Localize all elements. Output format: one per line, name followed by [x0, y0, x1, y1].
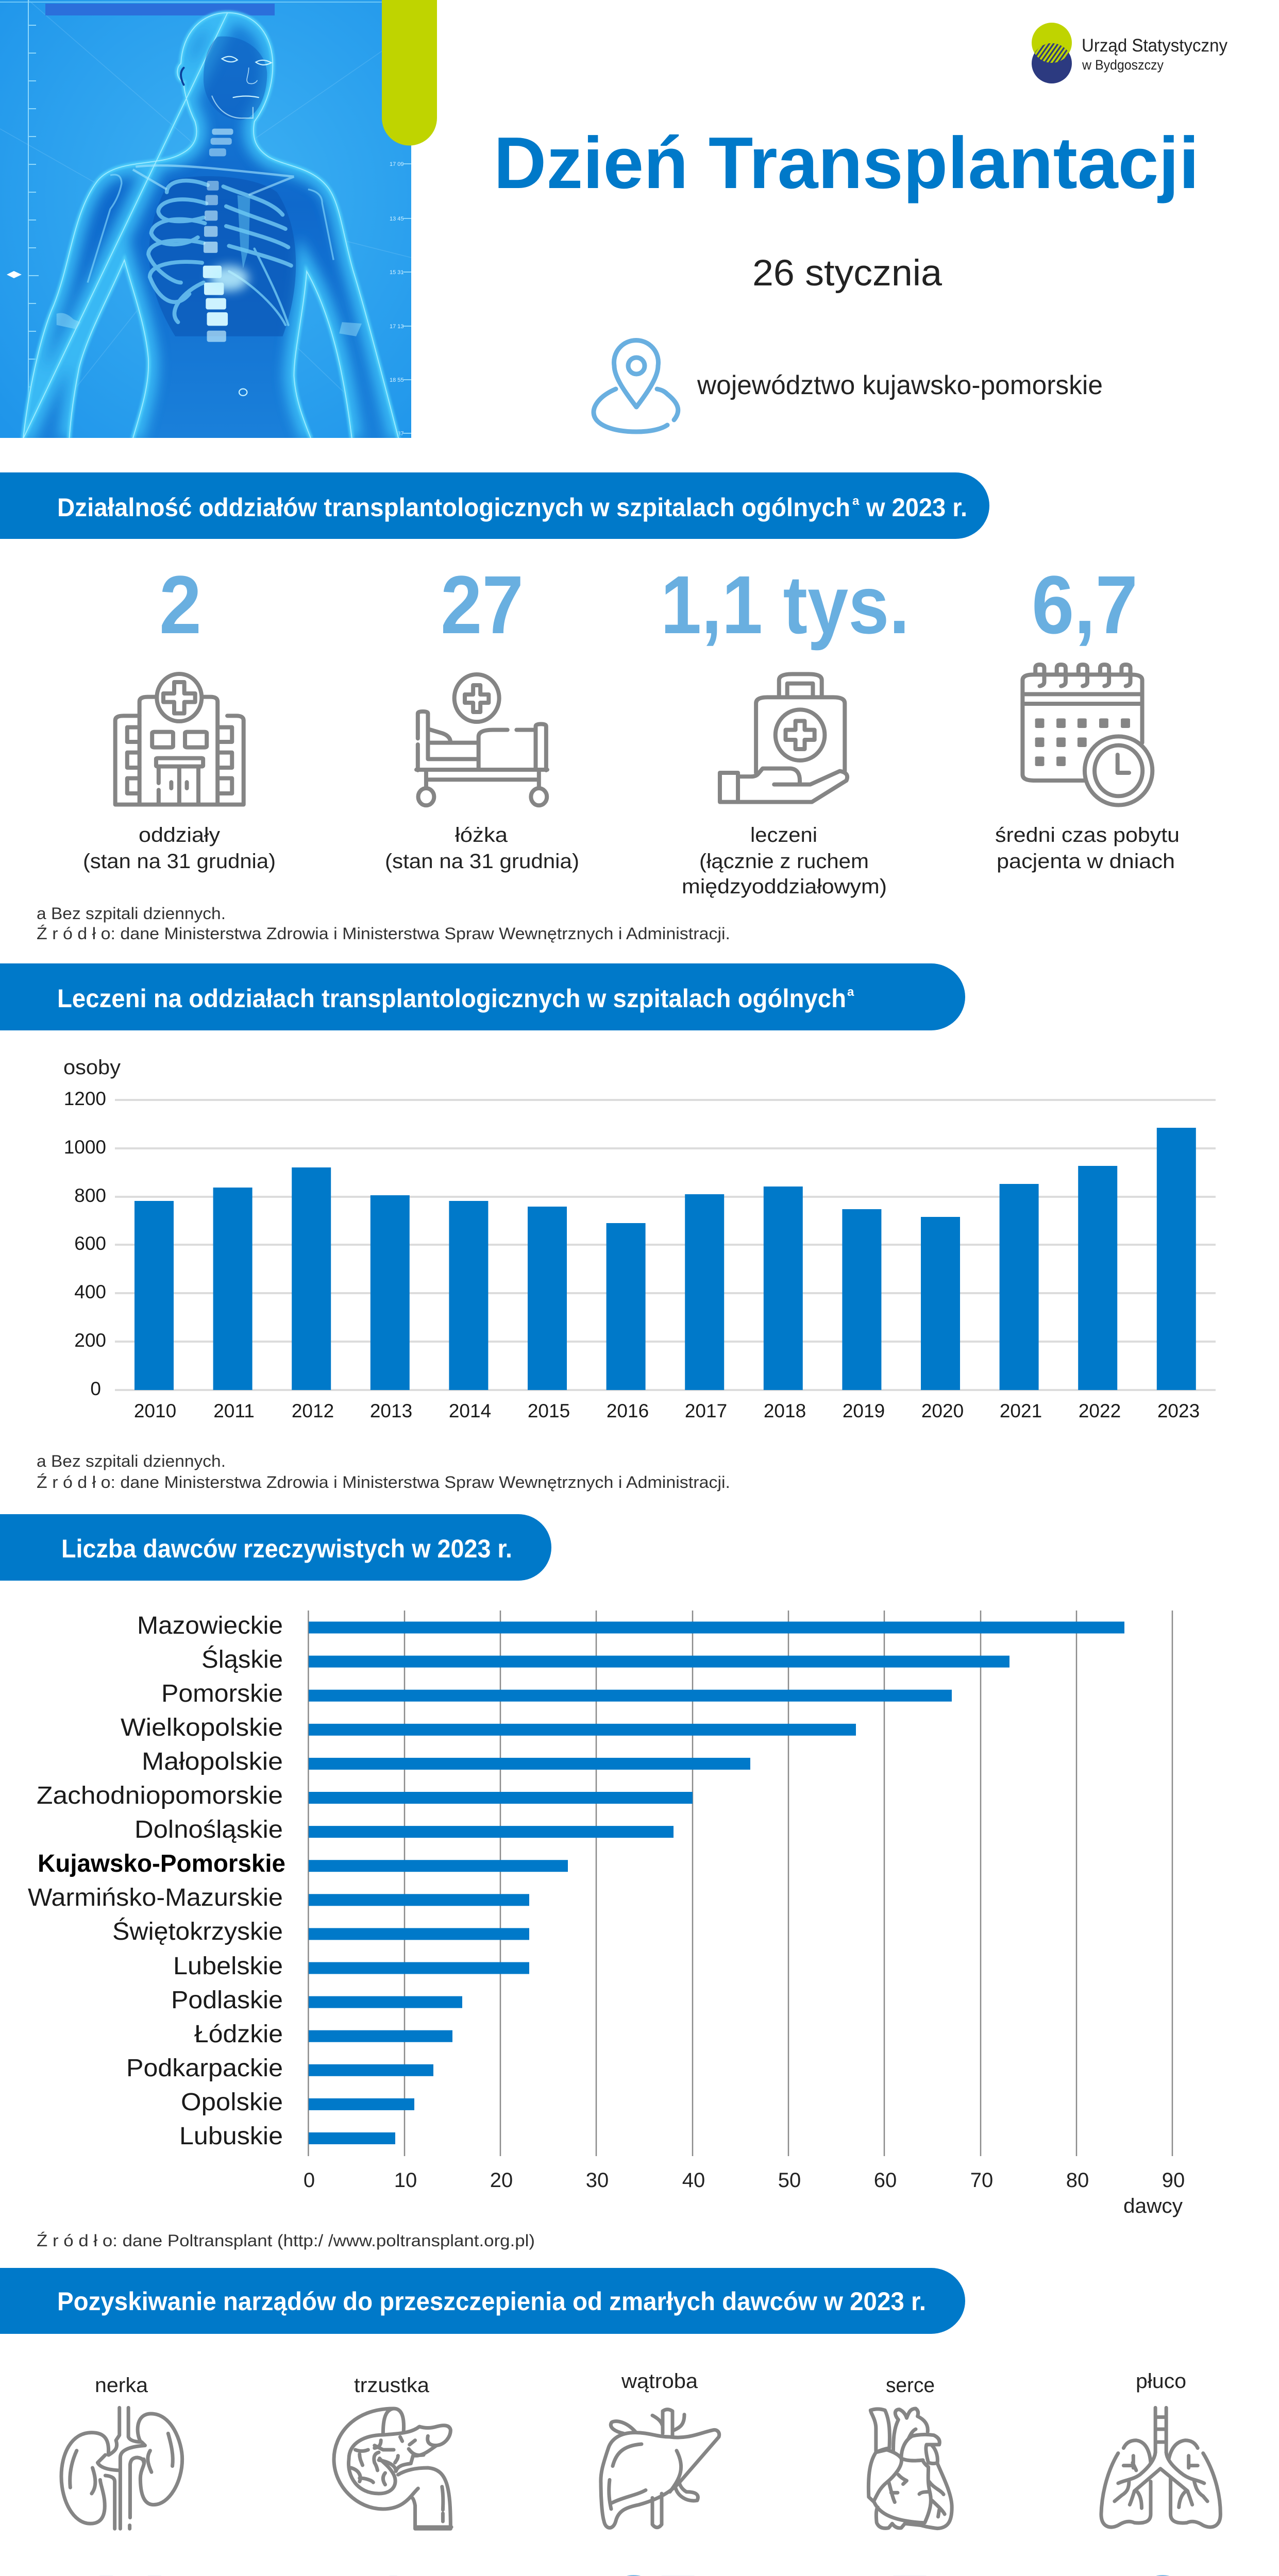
- bar chart: patients by year: 2013: [370, 1400, 412, 1421]
- bar chart: patients by year: 2022: [1079, 1400, 1121, 1421]
- stat: average stay: 6,7: [1032, 558, 1138, 651]
- bar chart: donors by voivodeship: Pomorskie: [161, 1680, 283, 1707]
- bar chart: patients by year: 2020: [921, 1400, 964, 1421]
- footnote and source: a Bez szpitali dziennych.: [37, 904, 226, 923]
- bar chart: patients by year: 2010: [134, 1400, 176, 1421]
- panel: header: [0, 0, 1227, 438]
- label: [385, 824, 579, 873]
- accent: green pill: [382, 0, 437, 145]
- organ: pancreas: [334, 2374, 451, 2576]
- bar chart: donors by voivodeship: Łódzkie: [194, 2021, 283, 2048]
- bar chart: donors by voivodeship: dawcy: [1123, 2195, 1183, 2217]
- label: [682, 824, 887, 898]
- bar chart: patients by year: 2018: [764, 1400, 806, 1421]
- heading band: [0, 2268, 965, 2334]
- bar chart: patients by year: 2011: [213, 1400, 255, 1421]
- bar chart: patients by year: 2014: [449, 1400, 491, 1421]
- illustration: human torso x-ray: 15 31: [390, 269, 404, 276]
- logo: Urząd Statystyczny w Bydgoszczy: Urząd Statystyczny: [1082, 36, 1227, 56]
- bar chart: patients by year: 2021: [1000, 1400, 1042, 1421]
- bar chart: patients by year: 2016: [607, 1400, 649, 1421]
- heading band: Liczba dawców rzeczywistych w 2023 r.: [61, 1534, 512, 1563]
- heading band: Pozyskiwanie narządów do przeszczepienia od zmarłych dawców w 2023 r.: [57, 2287, 926, 2316]
- icon: kidneys: [61, 2408, 182, 2529]
- stat: average stay: [995, 558, 1180, 873]
- bar chart: donors by voivodeship: 50: [778, 2169, 801, 2192]
- heading band: [0, 1514, 551, 1581]
- bar chart: donors by voivodeship: 40: [682, 2169, 705, 2192]
- bar chart: patients by year: 400: [74, 1281, 106, 1302]
- bar chart: patients by year: [63, 1056, 1216, 1421]
- footnote and source: [37, 1452, 730, 1492]
- bar chart: donors by voivodeship: Podlaskie: [171, 1987, 283, 2014]
- bar chart: donors by voivodeship: Wielkopolskie: [121, 1714, 283, 1741]
- bar chart: donors by voivodeship: 60: [874, 2169, 897, 2192]
- illustration: human torso x-ray: 13 45: [390, 216, 404, 222]
- label: (stan na 31 grudnia): [83, 850, 276, 873]
- bar chart: donors by voivodeship: 70: [970, 2169, 993, 2192]
- icon: location pin: [594, 340, 678, 432]
- label: [995, 824, 1180, 873]
- illustration: human torso x-ray: [0, 0, 411, 438]
- bar chart: donors by voivodeship: 30: [586, 2169, 609, 2192]
- organ: kidney: [61, 2374, 182, 2576]
- organ: liver: [601, 2370, 719, 2576]
- logo: Urząd Statystyczny w Bydgoszczy: [1032, 23, 1227, 83]
- label: [83, 824, 276, 873]
- illustration: human torso x-ray: 17 09: [390, 161, 404, 167]
- bar chart: donors by voivodeship: Opolskie: [181, 2089, 283, 2116]
- stat: wards: [83, 558, 276, 873]
- bar chart: donors by voivodeship: Lubelskie: [173, 1953, 283, 1980]
- label: oddziały: [139, 824, 220, 846]
- footnote and source: Ź r ó d ł o: dane Ministerstwa Zdrowia i Ministerstwa Spraw Wewnętrznych i Administracji.: [37, 1473, 730, 1492]
- heading band: [0, 472, 989, 539]
- bar chart: patients by year: 600: [74, 1233, 106, 1254]
- organ: liver: wątroba: [621, 2370, 698, 2393]
- organ: lung: płuco: [1136, 2370, 1186, 2393]
- organ: heart: serce: [886, 2374, 935, 2397]
- bar chart: donors by voivodeship: Mazowieckie: [137, 1612, 283, 1639]
- stat: beds: [385, 558, 579, 873]
- label: pacjenta w dniach: [997, 850, 1175, 873]
- label: leczeni: [750, 824, 817, 846]
- label: (łącznie z ruchem: [699, 850, 869, 873]
- bar chart: donors by voivodeship: Dolnośląskie: [134, 1816, 283, 1843]
- heading band: w 2023 r.: [866, 493, 967, 522]
- stat: beds: 27: [441, 558, 524, 651]
- bar chart: donors by voivodeship: Śląskie: [201, 1645, 283, 1673]
- illustration: human torso x-ray: 20 37: [390, 431, 404, 437]
- heading band: a: [852, 494, 860, 508]
- bar chart: donors by voivodeship: Zachodniopomorskie: [37, 1782, 283, 1809]
- bar chart: patients by year: 1000: [64, 1137, 106, 1158]
- heading band: [0, 963, 965, 1030]
- logo: Urząd Statystyczny w Bydgoszczy: w Bydgoszczy: [1082, 57, 1164, 73]
- bar chart: donors by voivodeship: Lubuskie: [179, 2123, 283, 2150]
- bar chart: patients by year: 800: [74, 1185, 106, 1206]
- stat: treated patients: 1,1 tys.: [661, 558, 910, 651]
- bar chart: donors by voivodeship: Warmińsko-Mazurskie: [28, 1884, 283, 1911]
- icon: first-aid kit on hand: [720, 674, 847, 802]
- bar chart: donors by voivodeship: 20: [490, 2169, 513, 2192]
- footnote and source: a Bez szpitali dziennych.: [37, 1452, 226, 1470]
- source: Ź r ó d ł o: dane Poltransplant (http:/ /www.poltransplant.org.pl): [37, 2231, 535, 2250]
- bar chart: donors by voivodeship: 0: [304, 2169, 315, 2192]
- bar chart: donors by voivodeship: 80: [1066, 2169, 1089, 2192]
- bar chart: patients by year: 2015: [528, 1400, 570, 1421]
- panel: treated patients chart: [0, 963, 1216, 1492]
- heading band: Działalność oddziałów transplantologicznych w szpitalach ogólnych: [57, 493, 850, 522]
- bar chart: donors by voivodeship: [28, 1611, 1185, 2217]
- date: 26 stycznia: [752, 253, 943, 294]
- bar chart: donors by voivodeship: 10: [394, 2169, 417, 2192]
- heading band: Leczeni na oddziałach transplantologicznych w szpitalach ogólnych: [57, 984, 846, 1013]
- label: łóżka: [455, 824, 508, 846]
- bar chart: patients by year: 200: [74, 1330, 106, 1351]
- footnote and source: [37, 904, 730, 943]
- bar chart: donors by voivodeship: Podkarpackie: [126, 2055, 283, 2082]
- organ: lung: [1101, 2370, 1220, 2576]
- icon: calendar with clock: [1022, 665, 1152, 805]
- bar chart: patients by year: 1200: [64, 1088, 106, 1109]
- illustration: human torso x-ray: 17 13: [390, 324, 404, 330]
- heading band: a: [847, 985, 854, 999]
- bar chart: patients by year: 2012: [292, 1400, 334, 1421]
- stat: wards: 2: [159, 558, 201, 651]
- icon: heart: [868, 2409, 952, 2529]
- panel: organ procurement: [0, 2268, 1220, 2576]
- icon: lungs: [1101, 2408, 1220, 2527]
- bar chart: donors by voivodeship: Małopolskie: [142, 1748, 283, 1775]
- title: Dzień Transplantacji: [494, 122, 1199, 204]
- illustration: human torso x-ray: 18 55: [390, 377, 404, 383]
- panel: ward activity: [0, 472, 1180, 943]
- icon: pancreas: [334, 2409, 451, 2529]
- label: (stan na 31 grudnia): [385, 850, 579, 873]
- bar chart: patients by year: 2023: [1157, 1400, 1200, 1421]
- stat: treated patients: [661, 558, 910, 898]
- bar chart: donors by voivodeship: Świętokrzyskie: [112, 1917, 283, 1945]
- label: średni czas pobytu: [995, 824, 1180, 846]
- label: międzyoddziałowym): [682, 875, 887, 898]
- icon: hospital: [115, 674, 244, 805]
- region label: województwo kujawsko-pomorskie: [697, 370, 1103, 400]
- organ: heart: [868, 2374, 952, 2576]
- icon: liver: [601, 2410, 719, 2528]
- icon: hospital bed: [416, 674, 547, 805]
- footnote and source: Ź r ó d ł o: dane Ministerstwa Zdrowia i Ministerstwa Spraw Wewnętrznych i Administracji.: [37, 924, 730, 943]
- organ: kidney: nerka: [95, 2374, 148, 2397]
- bar chart: patients by year: 2019: [843, 1400, 885, 1421]
- panel: actual donors chart: [0, 1514, 1185, 2250]
- bar chart: patients by year: 0: [90, 1378, 101, 1399]
- organ: pancreas: trzustka: [354, 2374, 430, 2397]
- bar chart: donors by voivodeship: Kujawsko-Pomorskie: [38, 1850, 285, 1877]
- bar chart: donors by voivodeship: 90: [1162, 2169, 1185, 2192]
- bar chart: patients by year: osoby: [63, 1056, 121, 1079]
- bar chart: patients by year: 2017: [685, 1400, 727, 1421]
